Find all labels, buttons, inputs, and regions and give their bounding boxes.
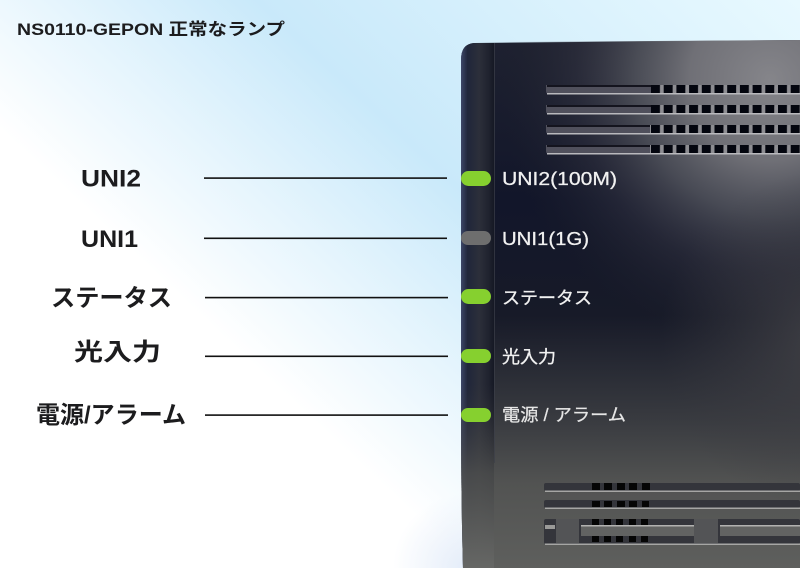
callout label: power/alarm: 電源/アラーム: [36, 402, 186, 429]
device: network unit photo: [461, 40, 800, 568]
device label: status: ステータス: [502, 288, 592, 308]
device right sheen: [640, 170, 800, 510]
callout label: UNI1: UNI1: [81, 226, 138, 253]
device side strip: [461, 43, 495, 568]
LED: UNI2: [461, 171, 491, 186]
leader line: UNI2: [204, 177, 447, 179]
LED: UNI1: [461, 231, 491, 245]
device top sheen: [494, 40, 800, 350]
device label: power/alarm: 電源 / アラーム: [502, 405, 626, 425]
callout label: optical input: 光入力: [74, 339, 161, 366]
device label: UNI1(1G): UNI1(1G): [502, 228, 589, 249]
callout label: UNI2: UNI2: [81, 166, 141, 192]
leader line: power/alarm: [205, 414, 448, 416]
vent bars and posts: [581, 525, 694, 536]
device label: optical input: 光入力: [502, 347, 556, 367]
LED: status: [461, 289, 491, 304]
leader line: status: [205, 297, 448, 298]
LED: optical input: [461, 349, 491, 363]
LED: power/alarm: [461, 408, 491, 422]
top vents: [546, 85, 800, 154]
device body: [461, 40, 800, 568]
bottom vents: [544, 483, 800, 545]
title: NS0110-GEPON 正常なランプ: [17, 20, 285, 39]
leader line: optical input: [205, 356, 448, 357]
leader line: UNI1: [204, 238, 447, 239]
callout label: status: ステータス: [51, 285, 172, 312]
device label: UNI2(100M): UNI2(100M): [502, 168, 617, 189]
vent squares: [592, 483, 650, 542]
